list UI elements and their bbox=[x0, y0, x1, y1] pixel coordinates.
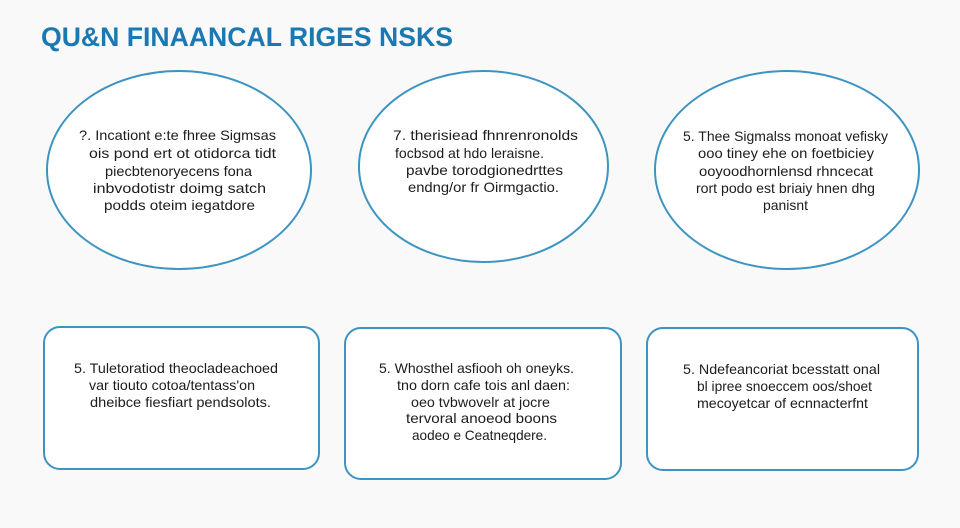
text block: bottom middle card: oeo tvbwovelr at jocre bbox=[411, 394, 550, 410]
panel: top middle oval bbox=[359, 71, 608, 262]
text block: top left oval: inbvodotistr doimg satch bbox=[93, 180, 266, 196]
text block: top left oval: podds oteim iegatdore bbox=[104, 197, 255, 213]
panel: top left oval bbox=[47, 71, 311, 269]
text block: top right oval bbox=[683, 128, 888, 213]
text block: top right oval: ooo tiney ehe on foetbiciey bbox=[698, 145, 874, 161]
text block: top middle oval: endng/or fr Oirmgactio. bbox=[408, 179, 559, 195]
text block: bottom right card bbox=[683, 361, 880, 411]
text block: bottom middle card bbox=[379, 360, 574, 443]
text block: top middle oval bbox=[393, 127, 578, 195]
panel: top right oval bbox=[655, 71, 919, 269]
text block: top left oval: piecbtenoryecens fona bbox=[105, 163, 252, 179]
text block: bottom middle card: tervoral anoeod boons bbox=[406, 410, 557, 426]
text block: top middle oval: pavbe torodgionedrttes bbox=[406, 162, 563, 178]
text block: top left oval bbox=[79, 127, 276, 213]
text block: top right oval: ooyoodhornlensd rhncecat bbox=[699, 163, 873, 179]
text block: bottom left card: var tiouto cotoa/tentass'on bbox=[89, 377, 255, 393]
text block: bottom left card: 5. Tuletoratiod theocladeachoed bbox=[74, 360, 278, 376]
text block: bottom right card: bl ipree snoeccem oos/shoet bbox=[697, 378, 872, 394]
panel: bottom middle card bbox=[345, 328, 621, 479]
text block: bottom right card: mecoyetcar of ecnnacterfnt bbox=[697, 395, 868, 411]
text block: bottom middle card: 5. Whosthel asfiooh oh oneyks. bbox=[379, 360, 574, 376]
text block: bottom left card: dheibce fiesfiart pendsolots. bbox=[90, 394, 271, 410]
text block: top right oval: 5. Thee Sigmalss monoat vefisky bbox=[683, 128, 888, 144]
panel: bottom right card bbox=[647, 328, 918, 470]
text block: top middle oval: 7. therisiead fhnrenronolds bbox=[393, 127, 578, 143]
title: QU&N FINAANCAL RIGES NSKS bbox=[41, 22, 453, 52]
panel: bottom left card bbox=[44, 327, 319, 469]
text block: top right oval: panisnt bbox=[763, 197, 808, 213]
text block: bottom middle card: aodeo e Ceatneqdere. bbox=[412, 427, 547, 443]
text block: bottom right card: 5. Ndefeancoriat bcesstatt onal bbox=[683, 361, 880, 377]
text block: top left oval: ?. Incationt e:te fhree Sigmsas bbox=[79, 127, 276, 143]
text block: bottom left card bbox=[74, 360, 278, 410]
text block: top right oval: rort podo est briaiy hnen dhg bbox=[696, 180, 875, 196]
text block: top middle oval: focbsod at hdo leraisne. bbox=[395, 145, 544, 161]
text block: top left oval: ois pond ert ot otidorca tidt bbox=[89, 145, 276, 161]
text block: bottom middle card: tno dorn cafe tois anl daen: bbox=[397, 377, 570, 393]
